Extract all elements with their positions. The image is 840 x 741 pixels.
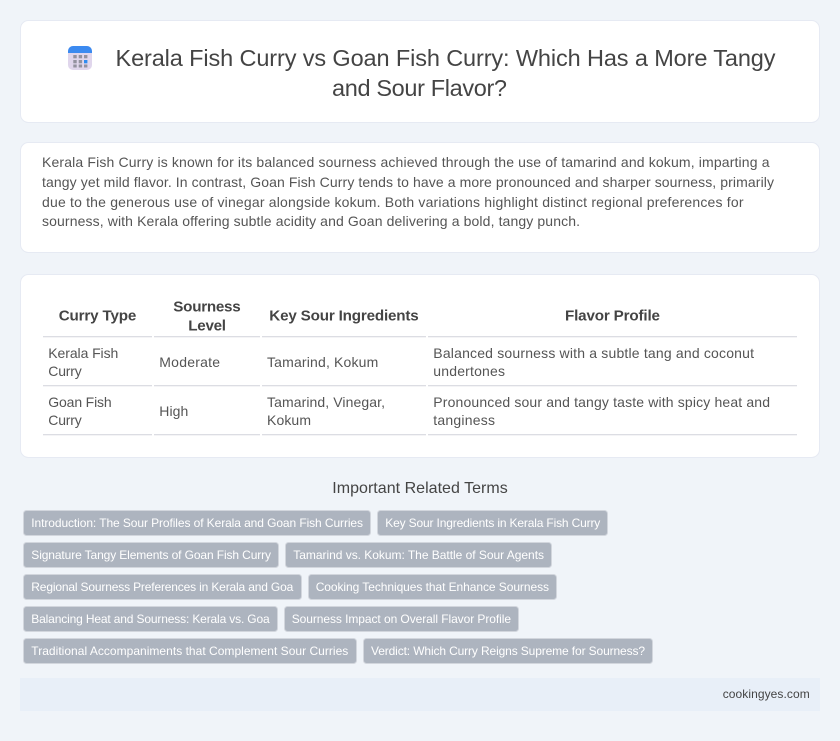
table row: Goan: Pronounced sour and tangy taste with spicy heat and: [433, 394, 770, 410]
tag list: related terms: Introduction: The Sour Profiles of Kerala and Goan Fish Curries: [31, 516, 363, 530]
table row: Kerala: undertones: [433, 363, 505, 379]
tag list: related terms: Traditional Accompaniments that Complement Sour Curries: [31, 644, 348, 658]
table header: Curry Type: [59, 308, 136, 324]
title: and Sour Flavor?: [332, 75, 507, 101]
table row: Kerala: Balanced sourness with a subtle tang and coconut: [433, 345, 754, 361]
table header: Sourness: [173, 298, 241, 316]
tag list: related terms: Balancing Heat and Sourness: Kerala vs. Goa: [31, 612, 270, 626]
table row: Goan: Kokum: [267, 412, 311, 428]
table row: Goan: tanginess: [433, 412, 495, 428]
table row: Kerala: Kerala Fish: [48, 345, 118, 361]
text block: intro: [42, 154, 774, 229]
table row: Kerala: [43, 345, 797, 386]
table row: Kerala: Moderate: [159, 354, 220, 370]
tag list: related terms: Regional Sourness Preferences in Kerala and Goa: [31, 580, 294, 594]
panel: intro text: [20, 142, 820, 252]
tag list: related terms: Cooking Techniques that Enhance Sourness: [316, 580, 549, 594]
title: Kerala Fish Curry vs Goan Fish Curry: Which Has a More Tangy: [116, 45, 776, 71]
tag list: related terms: Sourness Impact on Overall Flavor Profile: [292, 612, 511, 626]
icon: calendar: [68, 46, 92, 70]
tag list: related terms: Signature Tangy Elements of Goan Fish Curry: [31, 548, 271, 562]
text block: intro: sourness, with Kerala offering subtle acidity and Goan delivering a bold, tangy punch.: [42, 213, 580, 229]
table header: Key Sour Ingredients: [269, 308, 419, 324]
tag list: related terms: Tamarind vs. Kokum: The Battle of Sour Agents: [293, 548, 544, 562]
table row: Goan: Goan Fish: [48, 394, 112, 410]
tag list: related terms: Key Sour Ingredients in Kerala Fish Curry: [385, 516, 600, 530]
tag list: related terms: [24, 510, 652, 664]
heading: related terms: Important Related Terms: [332, 480, 508, 497]
table row: Kerala: Curry: [48, 363, 82, 379]
table row: Kerala: Tamarind, Kokum: [267, 354, 378, 370]
panel: comparison table: [20, 274, 820, 458]
text block: intro: tangy yet mild flavor. In contrast, Goan Fish Curry tends to have a more pronounced and sharper sourness, primarily: [42, 174, 774, 190]
table row: Goan: Tamarind, Vinegar,: [267, 394, 385, 410]
table row: Goan: High: [159, 403, 188, 419]
table header: [43, 298, 797, 337]
tag list: related terms: Verdict: Which Curry Reigns Supreme for Sourness?: [371, 644, 645, 658]
table row: Goan: [43, 394, 797, 435]
footer: [20, 678, 820, 711]
title: [116, 45, 776, 101]
table row: Goan: Curry: [48, 412, 82, 428]
text block: intro: Kerala Fish Curry is known for its balanced sourness achieved through the use of tamarind and kokum, imparting a: [42, 154, 770, 170]
table header: Flavor Profile: [565, 308, 660, 324]
text block: intro: due to the generous use of vinegar alongside kokum. Both variations highlight distinct regional preferences for: [42, 194, 744, 210]
footer: cookingyes.com: [723, 687, 810, 701]
table header: Level: [188, 318, 226, 334]
panel: title header: [20, 20, 820, 122]
